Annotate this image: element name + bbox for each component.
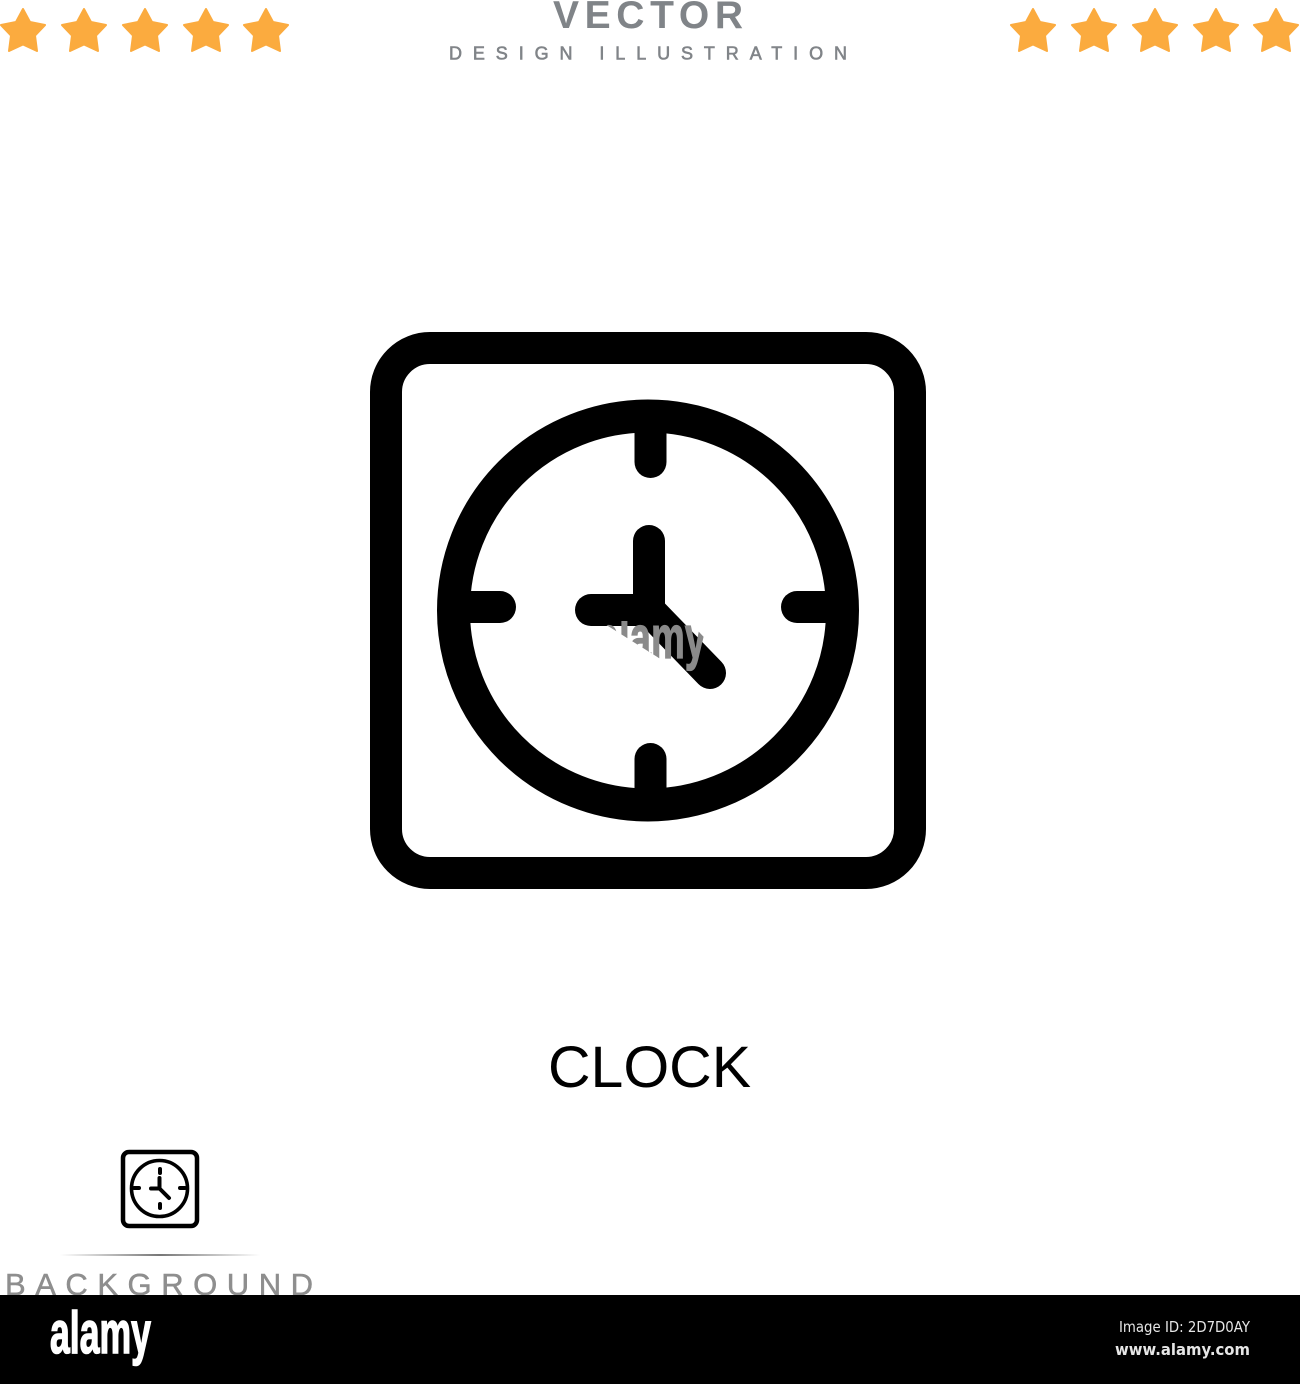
clock face [454,416,842,805]
icon: small clock [123,1152,197,1226]
left star rating [1,9,288,51]
watermark inside clock hands: alamy [598,604,706,671]
footer bar [0,1295,1300,1384]
icon frame: rounded square [386,348,910,873]
label: clock: CLOCK [548,1035,751,1100]
clock hands [591,541,710,673]
label: background: BACKGROUND [5,1267,313,1302]
right star rating [1011,9,1298,51]
footer website: www.alamy.com [1115,1340,1250,1359]
footer image id: Image ID: 2D7D0AY [1119,1318,1251,1336]
hour ticks [465,425,832,796]
subheading: design illustration: DESIGN ILLUSTRATION [449,44,847,64]
divider line [60,1254,260,1256]
icon: large clock [386,348,910,873]
footer logo: alamy: alamy [50,1300,151,1366]
